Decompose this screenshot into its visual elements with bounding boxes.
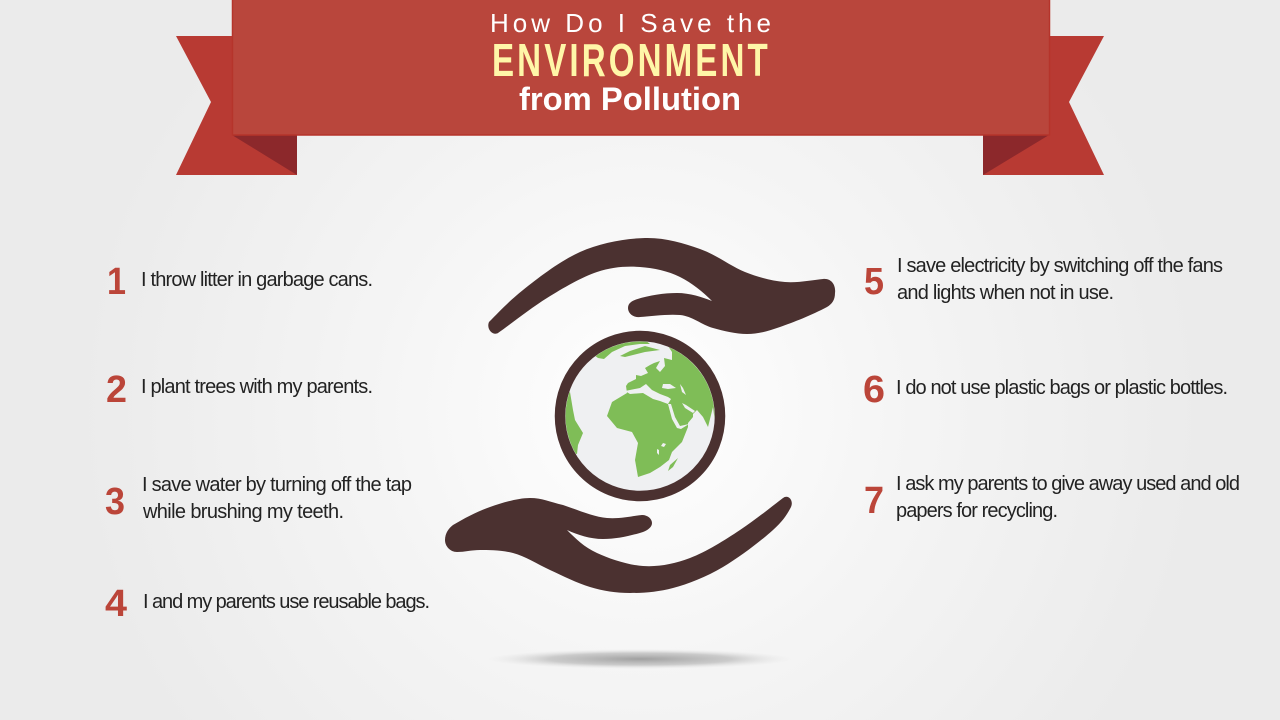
globe ring xyxy=(560,336,720,496)
item 4: I and my parents use reusable bags. xyxy=(143,591,430,613)
Madagascar xyxy=(668,458,678,471)
banner ribbon xyxy=(176,0,1104,175)
item 6 xyxy=(863,369,1228,411)
item 3: while brushing my teeth. xyxy=(142,501,344,523)
item 1: 1 xyxy=(107,261,126,303)
item 3 xyxy=(105,474,412,523)
Black Sea xyxy=(662,384,676,389)
item 7 xyxy=(864,473,1240,522)
South America xyxy=(566,392,583,454)
Greenland xyxy=(620,346,660,357)
Africa and Eurasia xyxy=(607,347,714,477)
title line 2: ENVIRONMENT xyxy=(492,36,768,86)
item 4: 4 xyxy=(105,583,127,625)
item 2: 2 xyxy=(106,369,127,411)
item 5: 5 xyxy=(864,261,884,303)
item 6: I do not use plastic bags or plastic bottles. xyxy=(896,377,1228,399)
item 3: 3 xyxy=(105,481,125,523)
item 1 xyxy=(107,261,373,303)
title xyxy=(490,8,771,117)
left ribbon fold xyxy=(232,135,297,175)
African lakes xyxy=(657,443,666,455)
icon: globe xyxy=(555,336,745,496)
item 6: 6 xyxy=(863,369,885,411)
item 3: I save water by turning off the tap xyxy=(142,474,412,496)
left ribbon tail xyxy=(176,36,297,175)
item 4 xyxy=(105,583,430,625)
right ribbon tail xyxy=(983,36,1104,175)
Persian Gulf xyxy=(682,403,695,413)
item 5 xyxy=(864,255,1223,304)
right ribbon fold xyxy=(983,135,1049,175)
item 7: I ask my parents to give away used and old xyxy=(896,473,1240,495)
shadow xyxy=(488,649,792,669)
icon: top hand xyxy=(488,238,835,334)
title line 3: from Pollution xyxy=(519,81,741,117)
icon: bottom hand xyxy=(445,497,792,593)
banner panel xyxy=(232,0,1050,135)
title line 1: How Do I Save the xyxy=(490,8,771,38)
item 7: papers for recycling. xyxy=(896,500,1058,522)
globe land xyxy=(566,342,714,477)
item 5: and lights when not in use. xyxy=(897,282,1114,304)
Mediterranean Sea xyxy=(625,384,671,404)
item 5: I save electricity by switching off the fans xyxy=(897,255,1223,277)
item 7: 7 xyxy=(864,480,884,522)
item 2: I plant trees with my parents. xyxy=(141,376,373,398)
Arctic coast xyxy=(596,342,650,359)
item 1: I throw litter in garbage cans. xyxy=(141,269,373,291)
item 2 xyxy=(106,369,373,411)
Caspian Sea xyxy=(680,384,686,395)
Red Sea and Gulf of Aden xyxy=(668,404,689,429)
